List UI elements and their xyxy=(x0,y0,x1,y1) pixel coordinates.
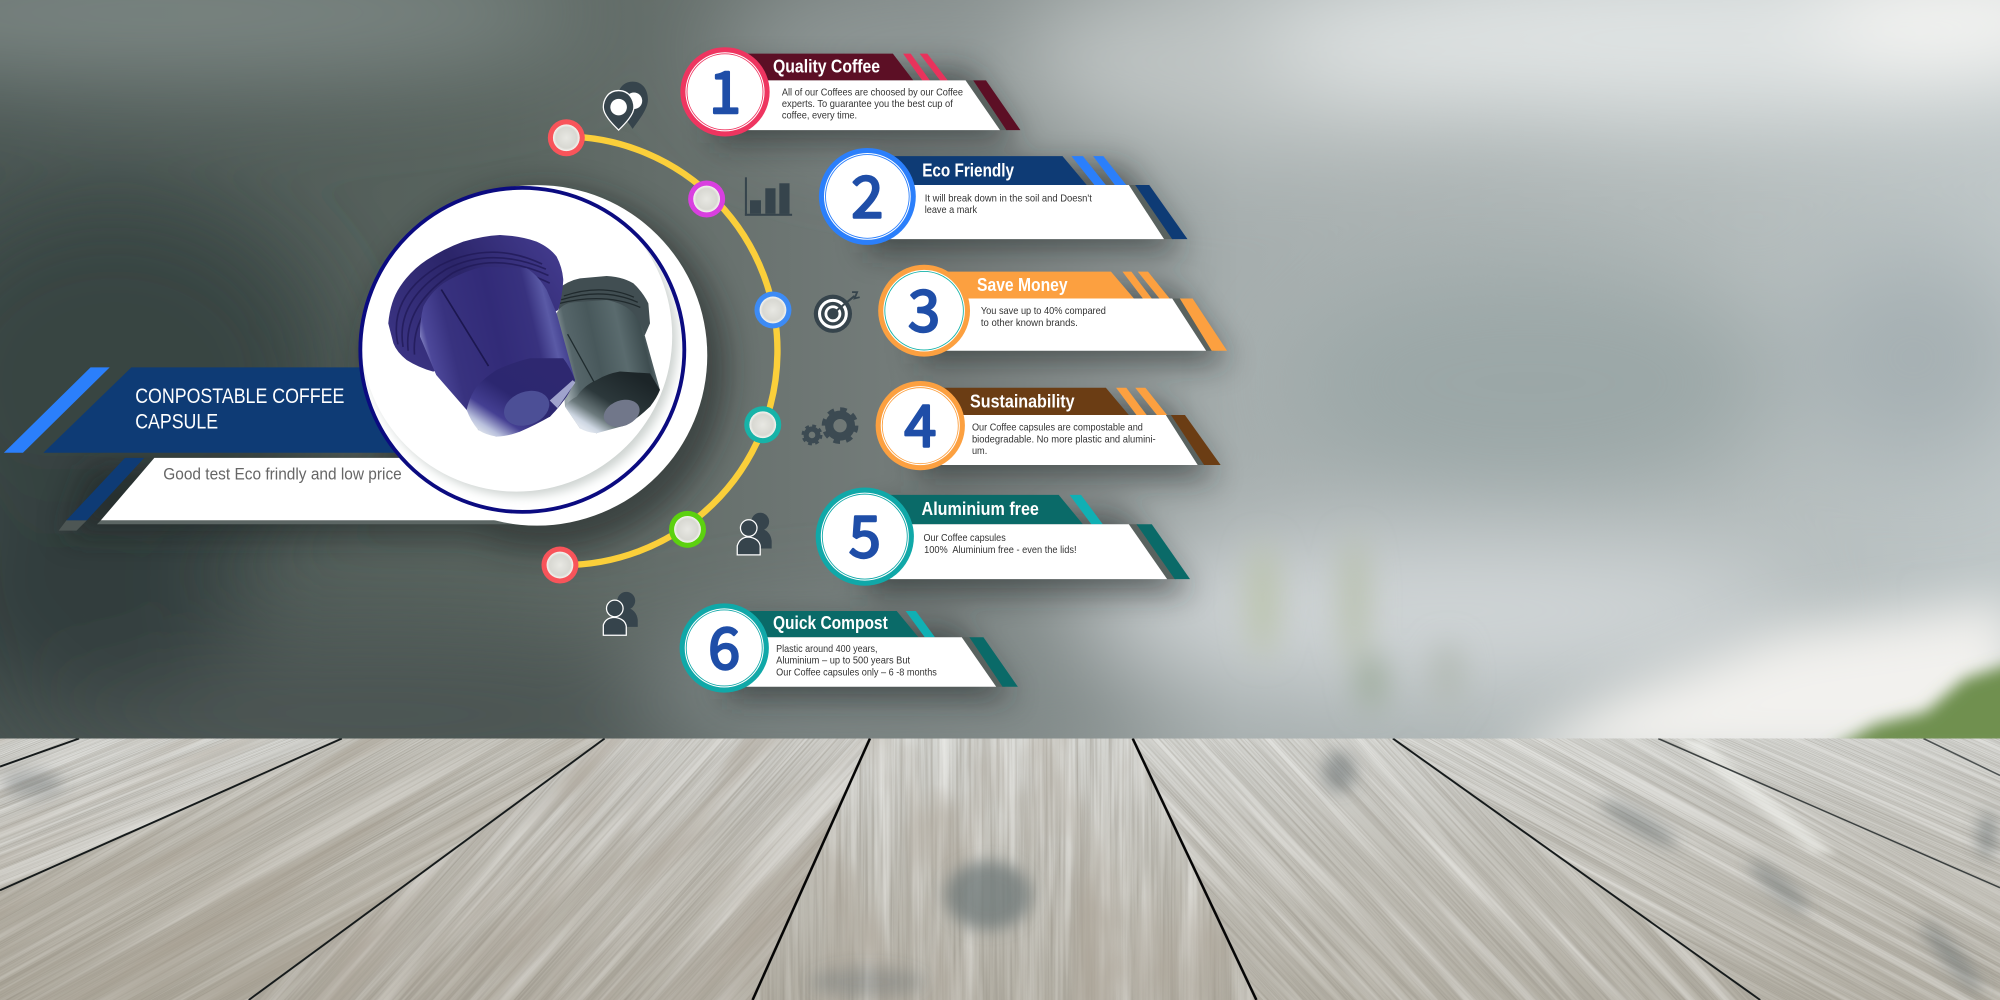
body text: biodegradable. No more plastic and alumini- xyxy=(972,434,1156,445)
arc connector xyxy=(560,136,777,565)
blurred background scenery xyxy=(0,0,2000,791)
panel: title banner xyxy=(4,367,536,531)
body text xyxy=(923,533,1077,556)
number badge: 1 xyxy=(709,46,741,130)
number badge xyxy=(819,148,916,245)
body text: 100% Aluminium free - even the lids! xyxy=(924,545,1077,556)
capsule: blue xyxy=(388,235,575,437)
heading: Sustainability xyxy=(970,391,1075,412)
body text: coffee, every time. xyxy=(782,111,857,122)
panel: title banner: CAPSULE xyxy=(135,409,218,434)
panel: 2 Eco Friendly xyxy=(819,148,1188,245)
number badge xyxy=(680,602,769,693)
number badge: 5 xyxy=(849,490,881,574)
body text xyxy=(925,194,1092,216)
icon: target xyxy=(814,292,860,333)
panel: 1 Quality Coffee xyxy=(680,46,1020,136)
body text: experts. To guarantee you the best cup of xyxy=(782,99,953,110)
body text: All of our Coffees are choosed by our Coffee xyxy=(782,88,963,99)
icon: bar chart xyxy=(745,177,792,216)
body text xyxy=(981,306,1106,329)
body text: to other known brands. xyxy=(981,318,1078,329)
icon: gears xyxy=(803,409,856,444)
heading: Quality Coffee xyxy=(773,56,880,77)
body text: Our Coffee capsules xyxy=(923,533,1006,544)
title text: CONPOSTABLE COFFEE xyxy=(135,383,344,408)
number badge xyxy=(878,265,970,357)
timeline nodes xyxy=(541,119,791,584)
panel: capsule medallion xyxy=(360,180,707,526)
body text: Plastic around 400 years, xyxy=(776,644,878,655)
body text xyxy=(776,644,937,679)
body text: Our Coffee capsules are compostable and xyxy=(972,422,1143,433)
subtitle band xyxy=(101,458,536,520)
panel: 6 Quick Compost xyxy=(680,602,1018,693)
number badge xyxy=(816,488,914,586)
body text: leave a mark xyxy=(925,205,978,216)
number badge xyxy=(680,46,770,136)
subtitle text: Good test Eco frindly and low price xyxy=(163,465,402,484)
body text: um. xyxy=(972,446,987,457)
body text: You save up to 40% compared xyxy=(981,306,1106,317)
subtitle band stripe xyxy=(66,458,144,520)
soft shadows behind infographic xyxy=(64,70,1231,699)
body text: Aluminium – up to 500 years But xyxy=(776,656,910,667)
body text: Our Coffee capsules only – 6 -8 months xyxy=(776,668,937,679)
panel: 3 Save Money xyxy=(878,265,1227,357)
capsule: grey xyxy=(557,276,660,433)
number badge: 3 xyxy=(908,265,940,349)
banner header xyxy=(43,367,510,453)
body text: It will break down in the soil and Doesn't xyxy=(925,194,1092,205)
panel: 5 Aluminium free xyxy=(816,488,1190,586)
number badge: 6 xyxy=(708,602,740,686)
body text xyxy=(782,88,963,122)
number badge: 2 xyxy=(851,150,883,234)
icon: people (lower) xyxy=(603,592,638,635)
banner accent stripe xyxy=(4,367,110,453)
heading: Eco Friendly xyxy=(922,160,1015,181)
heading: Aluminium free xyxy=(922,498,1039,519)
icon: people (upper) xyxy=(737,513,772,555)
panel: 4 Sustainability xyxy=(876,379,1221,470)
icon: map pins xyxy=(603,82,648,130)
number badge: 4 xyxy=(904,379,936,463)
number badge xyxy=(876,379,965,470)
heading: Quick Compost xyxy=(773,612,888,633)
wooden table xyxy=(0,726,2000,1000)
body text xyxy=(972,422,1156,457)
heading: Save Money xyxy=(977,274,1068,295)
wood knots xyxy=(1,751,1997,998)
